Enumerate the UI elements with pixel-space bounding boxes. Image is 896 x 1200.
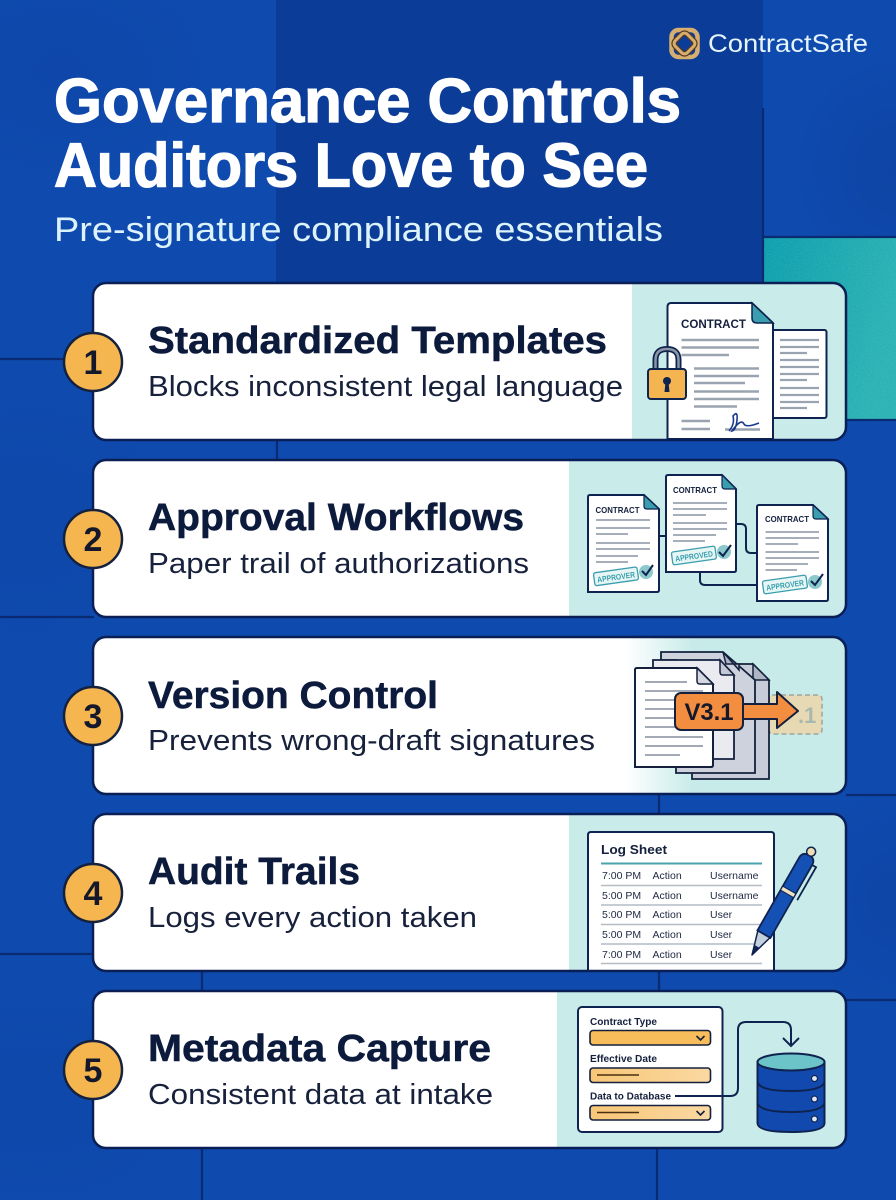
card outline <box>93 814 846 971</box>
document 1: CONTRACT <box>596 505 640 515</box>
panel: Version Control <box>64 637 846 794</box>
number badge 4 <box>64 864 122 922</box>
icon: contract with lock and signature: CONTRACT <box>681 317 747 331</box>
document 2: CONTRACT <box>673 485 718 495</box>
log sheet: Username <box>710 890 759 902</box>
heading: Metadata Capture <box>148 1028 491 1070</box>
icon: approval document chain <box>588 475 828 601</box>
log sheet: Action <box>652 949 682 961</box>
description: Consistent data at intake <box>148 1079 493 1111</box>
log sheet: Username <box>710 870 759 882</box>
log sheet: Log Sheet <box>601 842 668 857</box>
log sheet: Action <box>652 909 682 921</box>
ghost version box: .1 <box>798 703 816 728</box>
icon: pen <box>745 844 824 961</box>
heading: Standardized Templates <box>148 320 607 362</box>
log sheet: Action <box>652 929 682 941</box>
log sheet: Action <box>652 870 682 882</box>
heading: Audit Trails <box>148 851 360 893</box>
intake form: Contract Type <box>590 1017 657 1028</box>
document 2: APPROVED <box>675 549 714 564</box>
document 1: APPROVER <box>597 570 636 584</box>
document 1 <box>588 495 659 592</box>
logo: ContractSafe: ContractSafe <box>708 30 868 58</box>
intake form: Data to Database <box>590 1092 671 1102</box>
number badge 2 <box>64 510 122 568</box>
title <box>54 67 681 200</box>
number badge 3 <box>64 687 122 745</box>
icon: stacked versions with V3.1 arrow <box>635 652 822 779</box>
log sheet: 7:00 PM <box>602 949 641 961</box>
log sheet: Action <box>652 890 682 902</box>
number badge 2: 2 <box>84 521 102 559</box>
arrow: form to database <box>675 1022 799 1096</box>
number badge 5 <box>64 1041 122 1099</box>
description: Paper trail of authorizations <box>148 548 529 580</box>
ghost version box <box>769 695 822 734</box>
log sheet: 5:00 PM <box>602 929 641 941</box>
icon: contract with lock and signature <box>648 303 826 439</box>
icon: interlocked logo mark <box>672 30 698 57</box>
log sheet: 5:00 PM <box>602 909 641 921</box>
number badge 3: 3 <box>84 698 102 736</box>
log sheet: 7:00 PM <box>602 870 641 882</box>
log sheet: User <box>710 929 733 941</box>
document 3: APPROVER <box>766 578 805 593</box>
number badge 1 <box>64 333 122 391</box>
document 3 <box>757 505 828 601</box>
log sheet: 5:00 PM <box>602 890 641 902</box>
panel: Approval Workflows <box>64 460 846 617</box>
document 3: CONTRACT <box>765 514 810 524</box>
log sheet: User <box>710 909 733 921</box>
description: Logs every action taken <box>148 902 477 934</box>
number badge 1: 1 <box>84 344 102 382</box>
title: Governance Controls <box>54 67 681 136</box>
description: Blocks inconsistent legal language <box>148 371 623 403</box>
card outline <box>93 283 846 440</box>
description: Prevents wrong-draft signatures <box>148 725 595 757</box>
document 2 <box>666 475 736 572</box>
intake form: Effective Date <box>590 1054 657 1065</box>
intake form <box>578 1007 722 1132</box>
panel: Standardized Templates <box>64 283 846 440</box>
number badge 4: 4 <box>84 875 103 913</box>
icon: database <box>758 1054 824 1132</box>
heading: Approval Workflows <box>148 497 524 539</box>
log sheet <box>588 832 774 971</box>
panel: Metadata Capture <box>64 991 846 1148</box>
number badge 5: 5 <box>84 1052 102 1090</box>
title: Auditors Love to See <box>54 132 648 200</box>
heading: Version Control <box>148 675 438 717</box>
icon: stacked versions with V3.1 arrow: V3.1 <box>684 699 734 726</box>
subtitle: Pre-signature compliance essentials <box>54 211 663 249</box>
log sheet: User <box>710 949 733 961</box>
panel: Audit Trails <box>64 814 846 971</box>
